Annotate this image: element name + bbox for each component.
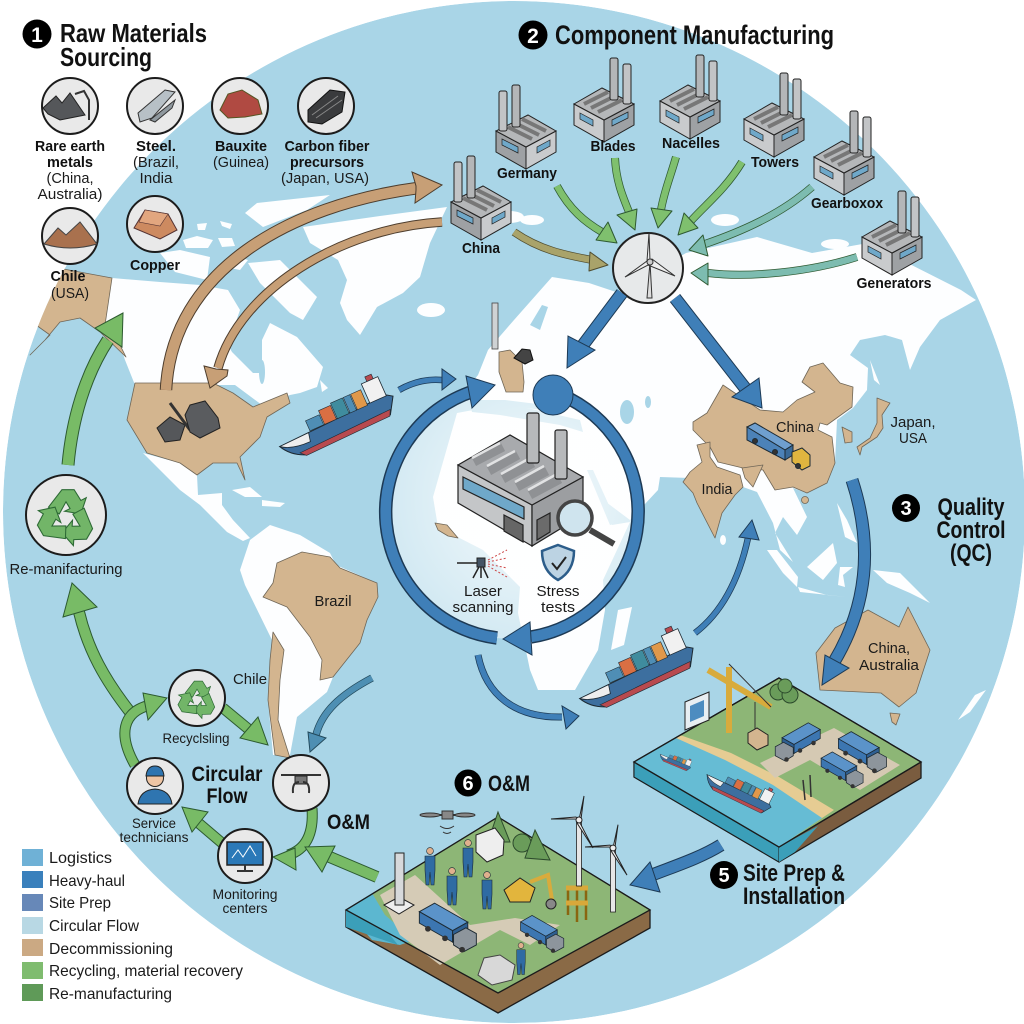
factory labels: Nacelles (662, 135, 720, 152)
circular flow labels: Service (132, 815, 176, 831)
truck 2 (521, 915, 564, 953)
factories (451, 55, 922, 275)
excavator on USA (157, 401, 220, 442)
legend: Re-manufacturing (49, 986, 172, 1003)
factory: Nacelles (660, 55, 720, 139)
factory: Germany (496, 85, 556, 169)
icon: rare earth (42, 78, 98, 134)
arrow: technicians to recycling (125, 693, 167, 765)
QC test labels: tests (541, 599, 575, 616)
circular flow labels: Circular (192, 763, 262, 786)
technician 2 (463, 840, 473, 877)
billboard (685, 692, 709, 730)
legend: Logistics (49, 850, 112, 867)
heading: site prep: Site Prep & (743, 860, 845, 887)
building (476, 828, 504, 862)
circular flow labels: technicians (120, 829, 188, 845)
circular flow labels: Flow (206, 785, 248, 808)
arrow: recycling to Chile (223, 708, 268, 745)
technician 4 (482, 872, 492, 909)
factory: Towers (744, 73, 804, 157)
icon: re-manufacturing (26, 475, 106, 555)
foundation (566, 885, 588, 922)
arrows: USA to China raw material flow (166, 172, 442, 390)
arrow: site to O&M (630, 845, 721, 892)
heading: site prep: Installation (743, 883, 845, 910)
icon: shield (542, 545, 574, 580)
raw material labels: metals (47, 154, 93, 171)
trees (770, 679, 798, 703)
heading: quality control: (QC) (950, 540, 992, 567)
heading: quality control: Control (936, 517, 1006, 544)
raw material labels: (Japan, USA) (281, 170, 369, 187)
heading: O&M 6 (454, 770, 530, 796)
factory: Generators (862, 191, 922, 275)
raw material labels: Rare earth (35, 138, 105, 155)
trees (488, 812, 550, 860)
arrow: China to Australia (822, 480, 865, 685)
heading: quality control: Quality (938, 494, 1005, 521)
arrow: right arc (503, 375, 638, 655)
raw material labels: Bauxite (215, 138, 267, 155)
raw material labels: Steel. (136, 138, 176, 155)
raw material labels (35, 138, 370, 302)
icon: monitor (218, 829, 272, 883)
factory labels: Gearboxox (811, 195, 884, 212)
arrow: ship to India (695, 520, 759, 633)
raw material icons (42, 78, 354, 264)
heading: raw materials: Sourcing (60, 42, 152, 72)
heading: raw materials: 1 (31, 24, 43, 47)
arrow: left arc (386, 376, 497, 638)
arrow: monitoring to technicians (182, 807, 222, 843)
heading: O&M 6: O&M (488, 771, 530, 796)
raw material labels: (Brazil, (133, 154, 179, 171)
icon: wind turbine hub (613, 233, 683, 303)
heading: quality control: 3 (900, 498, 912, 520)
country labels: China (776, 419, 815, 436)
label: re-manufacturing: Re-manifacturing (10, 561, 122, 578)
cargo box (748, 728, 768, 750)
country labels: Australia (859, 657, 920, 674)
inland water (259, 305, 651, 525)
QC test labels: Laser (464, 583, 502, 600)
arrow: South America logistics (308, 678, 372, 752)
icon: carbon fiber (298, 78, 354, 134)
trucks (419, 903, 476, 953)
raw material labels: Australia) (38, 186, 102, 203)
heading: site prep (710, 860, 845, 910)
inspection drone (420, 811, 475, 834)
heading: quality control (892, 494, 1006, 567)
icon: laser scanner (457, 550, 507, 578)
column (384, 853, 414, 914)
icon: service technician (127, 758, 183, 814)
country labels: Japan, (890, 414, 936, 431)
icon: drone (273, 755, 329, 811)
factory labels (462, 135, 932, 292)
icon: magnifier (558, 501, 614, 544)
icon: copper (127, 196, 183, 252)
wind turbine 2 (585, 825, 627, 912)
heading: raw materials (22, 18, 207, 72)
arrow: O&M site to drone (305, 846, 377, 877)
QC test labels: Stress (536, 583, 580, 600)
arrow: ship to Germany (399, 369, 456, 390)
circular flow labels: Recyclsling (162, 730, 230, 746)
panel: site preparation platform (634, 664, 921, 862)
palms (803, 775, 811, 800)
factory: China (451, 156, 511, 240)
raw material labels: precursors (290, 154, 364, 171)
country labels (233, 414, 936, 688)
factory: Blades (574, 58, 634, 142)
country labels: USA (899, 430, 927, 447)
small wind turbine tower (492, 303, 498, 349)
raw material labels: (Guinea) (213, 154, 269, 171)
legend: Recycling, material recovery (49, 963, 243, 980)
factory labels: Towers (751, 154, 799, 171)
arrow: to re-manufacturing (63, 583, 130, 712)
truck small (821, 752, 863, 788)
legend: Site Prep (49, 895, 111, 912)
factory labels: China (462, 240, 501, 257)
heading: O&M 6: 6 (462, 773, 474, 795)
factory labels: Generators (856, 275, 932, 292)
legend: Circular Flow (49, 918, 139, 935)
raw material labels: Copper (130, 257, 180, 274)
heading: raw materials: Raw Materials (60, 18, 207, 48)
heading: component manufacturing: 2 (527, 25, 539, 48)
arrows: heavy-haul from hub (567, 293, 762, 408)
circular flow labels: Monitoring (212, 886, 278, 902)
quality control loop (386, 375, 638, 655)
rubble (478, 955, 515, 985)
heading: component manufacturing: Component Manufacturing (555, 20, 834, 50)
country labels: Brazil (314, 593, 352, 610)
ship on river (702, 760, 779, 817)
raw material labels: (China, (46, 170, 94, 187)
technician 5 (517, 943, 525, 974)
factory labels: Germany (497, 165, 558, 182)
factory labels: Blades (590, 138, 636, 155)
circular flow labels: centers (222, 900, 268, 916)
icon: steel beam (127, 78, 183, 134)
legend (22, 849, 243, 1003)
legend: Decommissioning (49, 941, 173, 958)
crane (708, 664, 771, 733)
circular flow labels (120, 730, 370, 916)
tanker (838, 732, 886, 773)
arrows into turbine hub (514, 157, 857, 285)
excavator (504, 875, 556, 909)
panel: O&M platform (346, 796, 650, 1013)
country labels: China, (868, 640, 910, 657)
small excavator (514, 349, 533, 364)
land masses (105, 195, 986, 755)
raw material labels: (USA) (51, 285, 89, 302)
icon: chile mine (42, 208, 98, 264)
truck in China (747, 423, 810, 470)
technician 3 (447, 868, 457, 905)
technicians (425, 848, 435, 885)
icon: recycling (169, 670, 225, 726)
trucks (775, 723, 820, 762)
heading: site prep: 5 (718, 865, 730, 887)
raw material labels: Carbon fiber (284, 138, 370, 155)
raw material labels: India (140, 170, 173, 187)
legend: Heavy-haul (49, 873, 125, 890)
circular flow labels: O&M (327, 811, 370, 834)
factory: Gearbox (814, 111, 874, 195)
country labels: India (702, 481, 733, 498)
QC test labels: scanning (452, 599, 514, 616)
wind turbine 1 (551, 796, 593, 886)
icon: bauxite (212, 78, 268, 134)
cargo ship: Atlantic (268, 370, 401, 464)
factory under inspection (458, 413, 583, 546)
country labels: Chile (233, 671, 267, 688)
QC test labels (452, 583, 580, 616)
inspection disc background (392, 400, 632, 638)
highlighted countries (30, 268, 930, 758)
arrow: loop to ship (478, 655, 579, 729)
cargo ship: Indian Ocean (568, 622, 701, 716)
circular flow (10, 313, 377, 916)
small boat (658, 747, 694, 773)
arrow: up to Alaska (68, 313, 123, 465)
arrow: drone to monitoring (273, 808, 312, 870)
raw material labels: Chile (50, 268, 86, 285)
